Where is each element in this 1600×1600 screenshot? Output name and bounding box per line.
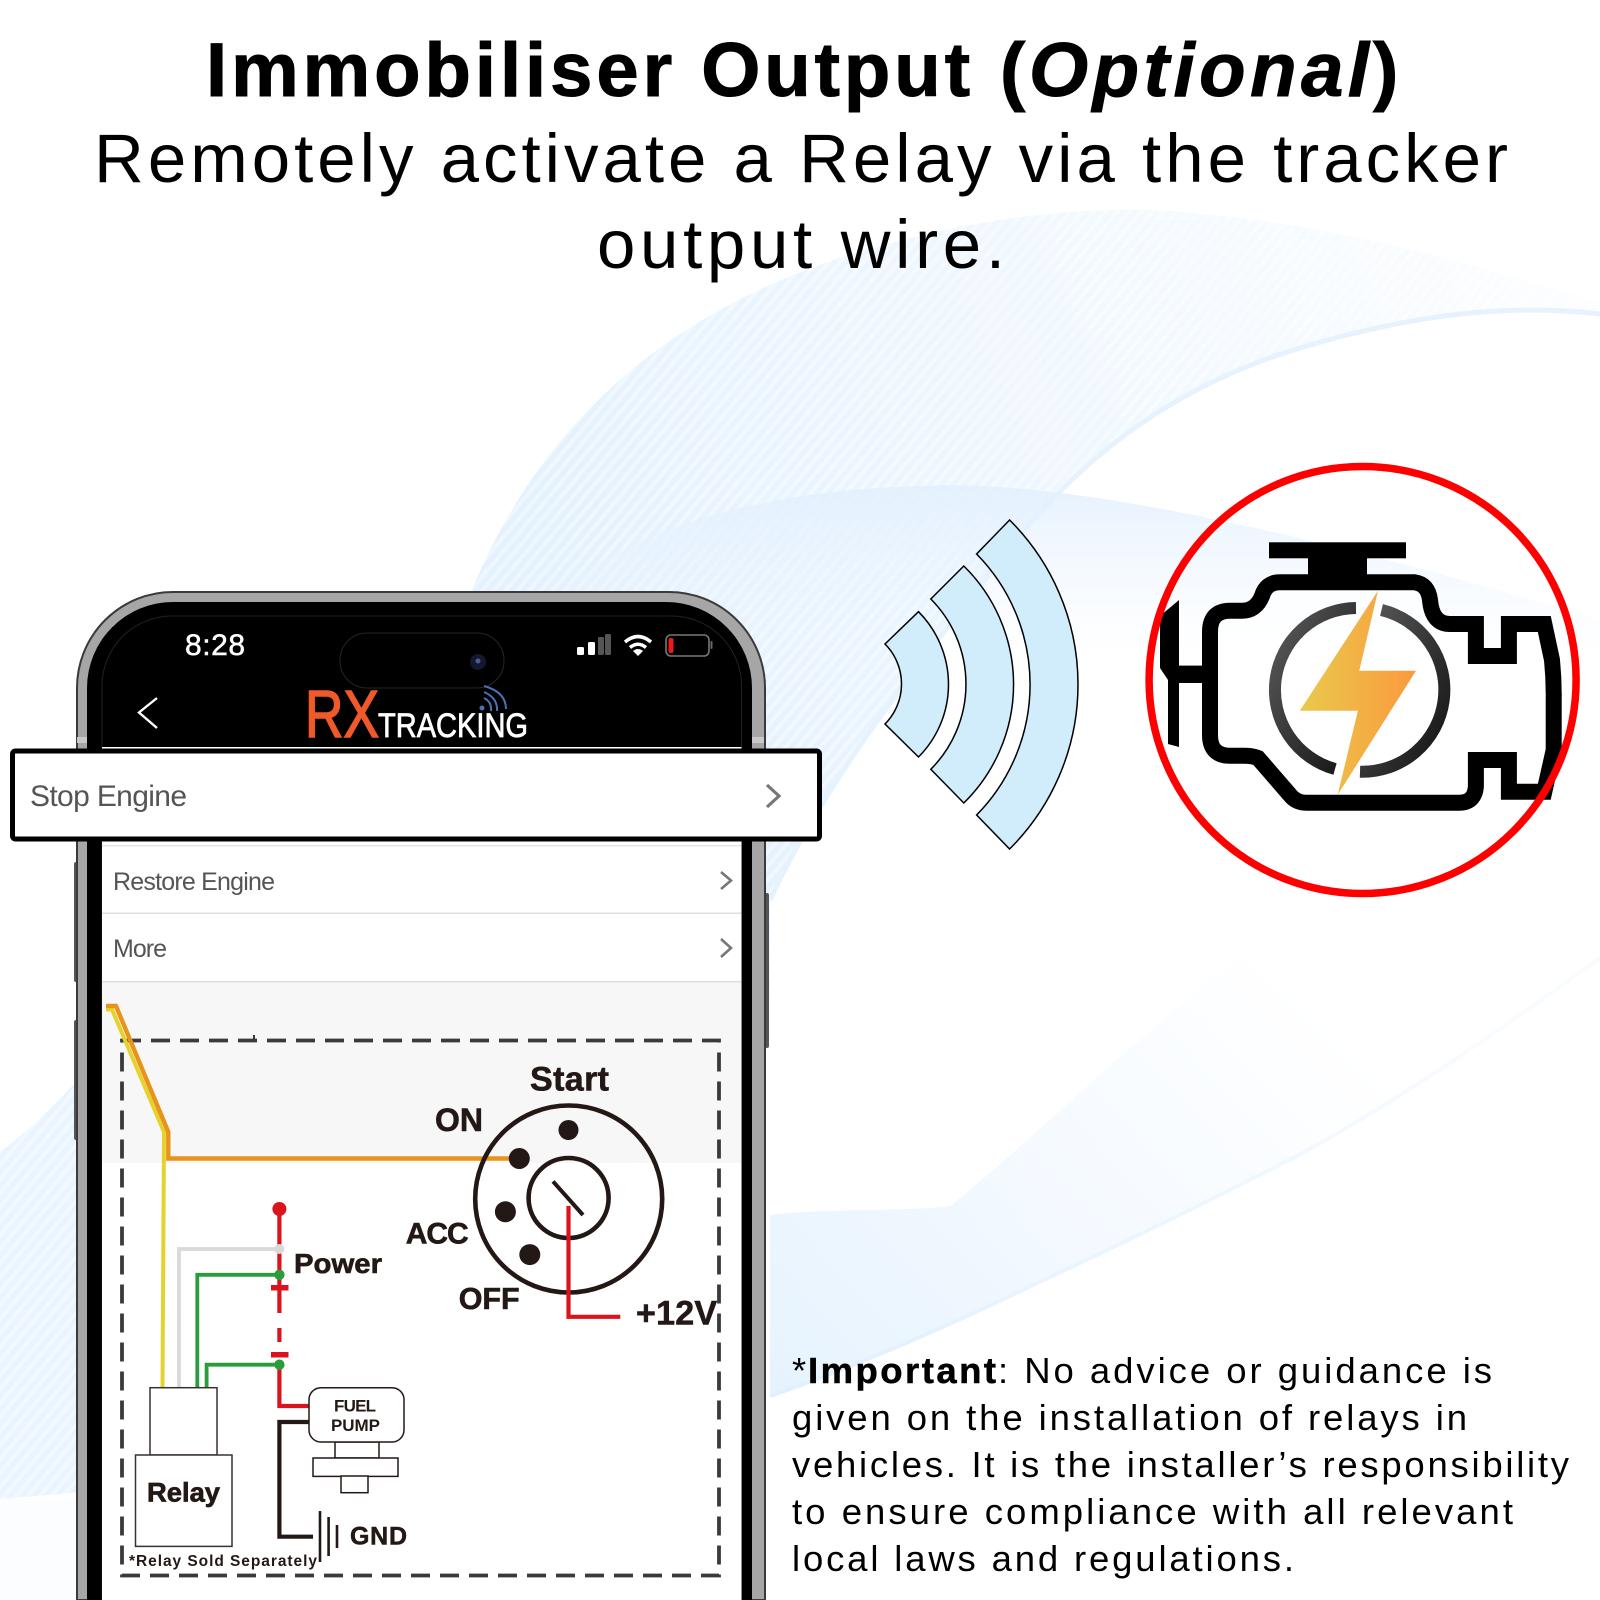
back arrow [139,698,157,728]
fuel pump [309,1388,404,1493]
wiring diagram [106,1006,719,1576]
grey wire [179,1249,279,1387]
important notice: local laws and regulations. [792,1538,1294,1579]
lightning bolt [1300,591,1416,795]
power line [271,1202,309,1406]
green wires [197,1270,285,1387]
subtitle: output wire. [597,206,1005,283]
status time: 8:28 [185,629,245,662]
menu row: restore engine [113,868,731,896]
phone frame [77,592,765,1600]
important notice: vehicles. It is the installer’s responsibility [792,1444,1570,1485]
ignition switch [475,1106,662,1317]
menu row: more [113,935,731,963]
orange wire [106,1006,511,1158]
stop engine highlight row [12,751,820,839]
title: Optional [1029,28,1371,113]
yellow wire [106,1010,164,1387]
important notice: : No advice or guidance is [998,1350,1492,1391]
red circle [1149,466,1576,894]
relay note: *Relay Sold Separately [129,1553,317,1570]
menu row: more: More [113,935,167,963]
subtitle: Remotely activate a Relay via the tracker [94,120,1508,197]
engine icon [1160,542,1554,803]
switch labels [406,1060,717,1333]
switch labels: OFF [459,1282,520,1316]
important notice [792,1350,1570,1579]
important notice: given on the installation of relays in [792,1397,1467,1438]
switch labels: ACC [406,1218,469,1251]
menu row: restore engine: Restore Engine [113,868,275,896]
stop engine highlight row: Stop Engine [30,780,187,813]
screen content background [102,747,742,1600]
important notice: Important [808,1350,996,1391]
relay: Relay [147,1478,220,1508]
fuel pump: FUEL [334,1396,376,1415]
signal bars [577,634,611,655]
fuel pump: PUMP [331,1416,380,1435]
gauge ring [1275,608,1444,772]
important notice: * [792,1350,806,1391]
title: Immobiliser Output [206,28,970,113]
engine outline [1160,542,1554,803]
logo: TRACKING [378,707,528,745]
wifi icon [625,636,651,656]
logo: RX [305,677,379,752]
switch labels: Start [530,1060,609,1098]
signal waves icon [885,520,1078,849]
important notice: to ensure compliance with all relevant [792,1491,1513,1532]
switch labels: ON [435,1102,483,1138]
title: ) [1373,28,1398,113]
ground wire and symbol [279,1422,337,1562]
title [206,28,1398,113]
phone [74,592,769,1600]
gnd label: GND [350,1522,407,1550]
phone side buttons [74,862,769,1140]
camera island [340,633,504,688]
power label: Power [294,1248,382,1279]
switch labels: +12V [636,1295,717,1333]
dashed boundary [122,1035,719,1576]
relay [136,1388,232,1546]
logo [305,677,528,752]
title: ( [1000,28,1026,113]
subtitle [94,120,1508,283]
battery icon [666,635,712,656]
